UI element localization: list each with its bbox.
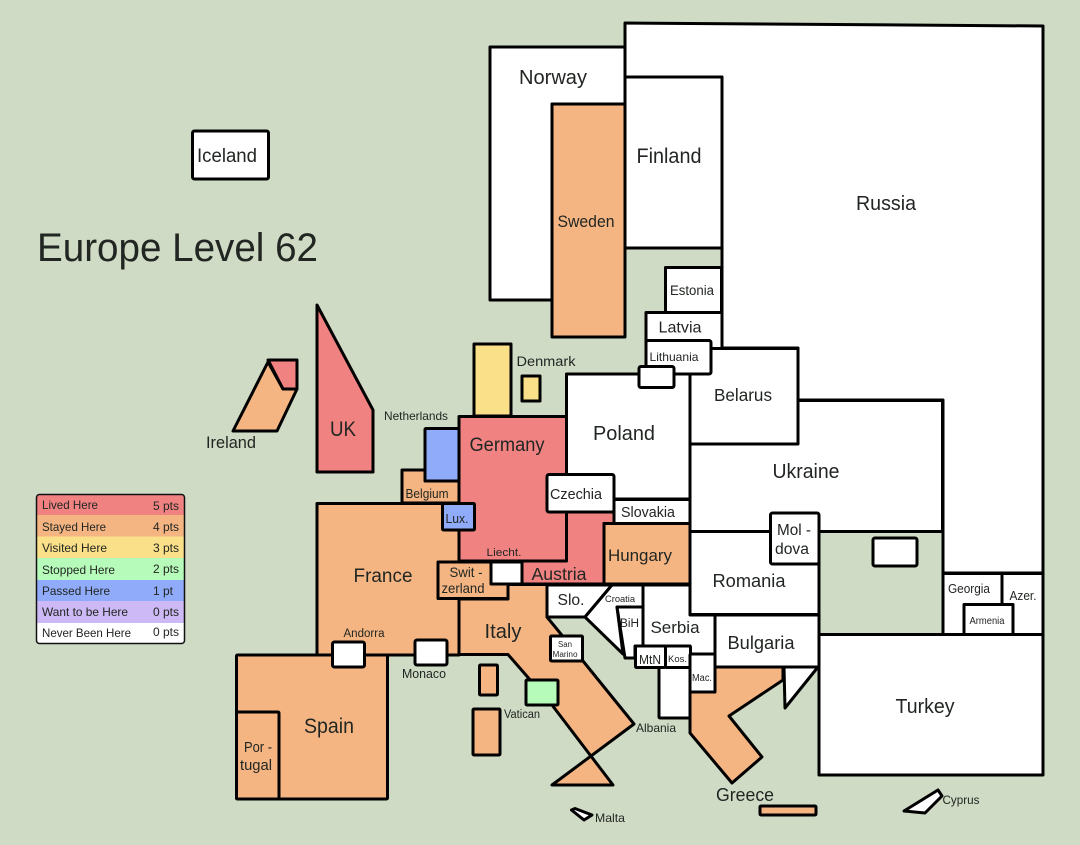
country: Austria: Austria	[532, 564, 587, 584]
country: Montenegro: MtN	[639, 653, 661, 667]
island: Corsica	[480, 665, 498, 695]
legend row: Stopped Here: Stopped Here	[42, 563, 115, 577]
legend row: Want to be Here: 0 pts	[153, 605, 179, 619]
country: Croatia	[585, 585, 643, 654]
country: Greece: Greece	[716, 785, 774, 805]
country: Malta	[572, 808, 625, 825]
legend row: Visited Here: 3 pts	[153, 541, 179, 555]
country: Ireland	[206, 362, 297, 452]
legend row: Want to be Here: Want to be Here	[42, 605, 128, 619]
country: Greece	[690, 667, 816, 815]
legend row: Visited Here	[37, 536, 184, 558]
country: Portugal: Por -	[244, 739, 272, 756]
country: Monaco: Monaco	[402, 667, 446, 681]
country: Montenegro	[636, 646, 666, 668]
country: UK: UK	[330, 418, 356, 441]
country: Switzerland: zerland	[442, 580, 484, 596]
country: Poland	[566, 374, 690, 499]
country: Albania	[636, 667, 690, 735]
legend row: Lived Here	[37, 495, 184, 515]
country: Ireland: Ireland	[206, 434, 256, 452]
country: Macedonia: Mac.	[692, 673, 712, 684]
country: Lithuania	[646, 340, 711, 374]
country: Netherlands	[384, 409, 459, 481]
country: Belarus: Belarus	[714, 385, 772, 405]
country: UK	[317, 305, 373, 472]
country: Belarus	[690, 348, 798, 444]
legend row: Want to be Here	[37, 601, 184, 623]
country: Portugal	[236, 712, 279, 799]
country: Ukraine: Ukraine	[772, 461, 840, 483]
country: Denmark: Denmark	[516, 354, 576, 369]
country: Luxembourg	[442, 504, 474, 530]
country: Italy	[459, 584, 634, 785]
country: San Marino: Marino	[552, 650, 578, 659]
country: Sweden	[552, 104, 625, 337]
country: France: France	[354, 566, 412, 587]
country: Albania: Albania	[636, 721, 676, 735]
country: Slovakia: Slovakia	[621, 505, 676, 521]
country: Switzerland	[438, 562, 508, 598]
country: Czechia	[547, 474, 614, 512]
country: Bulgaria: Bulgaria	[728, 633, 795, 653]
country: Norway	[490, 47, 625, 300]
country: Kosovo: Kos.	[668, 654, 687, 665]
country: Luxembourg: Lux.	[446, 512, 468, 526]
country: Azerbaijan	[1002, 574, 1043, 634]
country: Finland: Finland	[636, 145, 702, 168]
country: Bosnia and Herzegovina	[617, 607, 643, 658]
country: Austria	[522, 512, 614, 584]
country: Turkey	[819, 634, 1043, 775]
title: Europe Level 62	[37, 226, 318, 270]
country: Romania: Romania	[712, 571, 786, 591]
country: Belgium: Belgium	[406, 487, 448, 501]
country: Slovenia: Slo.	[558, 592, 584, 609]
country: Hungary	[604, 524, 690, 584]
country: Latvia: Latvia	[658, 320, 702, 336]
country: Estonia: Estonia	[670, 283, 714, 298]
legend row: Stayed Here	[37, 515, 184, 536]
country: Portugal: tugal	[240, 757, 272, 774]
country: Spain	[236, 655, 388, 799]
country: Turkey: Turkey	[896, 696, 954, 718]
country: Germany: Germany	[470, 435, 545, 456]
country: Russia	[625, 23, 1043, 573]
country: Slovakia	[614, 500, 690, 524]
country: Ukraine	[690, 400, 942, 532]
country: Bosnia and Herzegovina: BiH	[620, 618, 639, 630]
country: Croatia: Croatia	[605, 594, 635, 604]
country: Russia: Russia	[856, 193, 917, 215]
country: Cyprus	[904, 790, 980, 813]
country: Kosovo	[666, 646, 690, 668]
country: France	[317, 504, 459, 655]
island: Sardinia	[473, 709, 500, 755]
legend row: Lived Here: Lived Here	[42, 498, 98, 512]
country: Iceland	[192, 131, 268, 179]
country: Liechtenstein	[486, 547, 522, 584]
country: Georgia	[943, 574, 1002, 634]
country: Poland: Poland	[593, 422, 655, 445]
country: Finland	[625, 77, 722, 248]
legend row: Lived Here: 5 pts	[153, 499, 179, 513]
country: Liechtenstein: Liecht.	[486, 547, 522, 559]
country: Macedonia	[690, 654, 715, 692]
country: Switzerland: Swit -	[450, 564, 483, 580]
country: Andorra: Andorra	[344, 628, 385, 640]
country: Germany	[459, 416, 566, 561]
legend	[36, 494, 184, 644]
country: Azerbaijan: Azer.	[1010, 589, 1036, 603]
legend row: Visited Here: Visited Here	[42, 541, 107, 555]
legend row: Never Been Here: Never Been Here	[42, 626, 131, 640]
country: Serbia: Serbia	[650, 618, 700, 637]
country: Armenia: Armenia	[970, 615, 1005, 627]
legend row: Passed Here	[37, 580, 184, 601]
country: Georgia: Georgia	[948, 582, 990, 596]
Northern Ireland	[268, 360, 297, 389]
country: Romania	[690, 532, 819, 614]
country: Estonia	[666, 268, 722, 312]
country: Vatican: Vatican	[504, 709, 540, 721]
legend row: Never Been Here	[42, 625, 179, 640]
country: Netherlands: Netherlands	[384, 409, 448, 423]
legend row: Passed Here: Passed Here	[42, 584, 110, 598]
country: Iceland: Iceland	[197, 146, 257, 167]
legend row: Never Been Here: 0 pts	[153, 625, 179, 639]
legend row: Passed Here: 1 pt	[153, 584, 174, 598]
country: Moldova	[770, 513, 819, 564]
Turkey Thrace	[784, 667, 818, 708]
country: Bulgaria	[715, 615, 819, 667]
country: Denmark	[474, 344, 576, 416]
country: Malta: Malta	[595, 811, 625, 825]
country: Slovenia	[547, 585, 612, 617]
legend row: Stayed Here: 4 pts	[153, 520, 179, 534]
country: Sweden: Sweden	[558, 213, 614, 231]
country: Cyprus: Cyprus	[942, 793, 980, 807]
country: Serbia	[643, 585, 715, 654]
legend row: Stopped Here: 2 pts	[153, 562, 179, 576]
legend row: Stayed Here: Stayed Here	[42, 520, 106, 534]
country: San Marino: San	[558, 640, 572, 649]
country: Moldova: dova	[775, 541, 809, 558]
country: Armenia	[964, 604, 1013, 634]
country: Italy: Italy	[484, 620, 522, 643]
country: Lithuania: Lithuania	[650, 350, 699, 364]
country: San Marino	[550, 636, 582, 661]
country: Belgium	[402, 470, 459, 503]
country: Hungary: Hungary	[608, 546, 672, 565]
country: Norway: Norway	[519, 67, 587, 89]
legend row: Stopped Here	[37, 558, 184, 580]
country: Andorra	[332, 628, 385, 667]
country: Moldova: Mol -	[777, 522, 811, 539]
Crimea box	[873, 538, 917, 566]
country: Czechia: Czechia	[550, 486, 603, 503]
country: Vatican	[504, 680, 558, 721]
country: Spain: Spain	[304, 715, 354, 738]
country: Latvia	[646, 312, 722, 348]
Kaliningrad box	[639, 366, 674, 388]
country: Monaco	[402, 640, 447, 681]
